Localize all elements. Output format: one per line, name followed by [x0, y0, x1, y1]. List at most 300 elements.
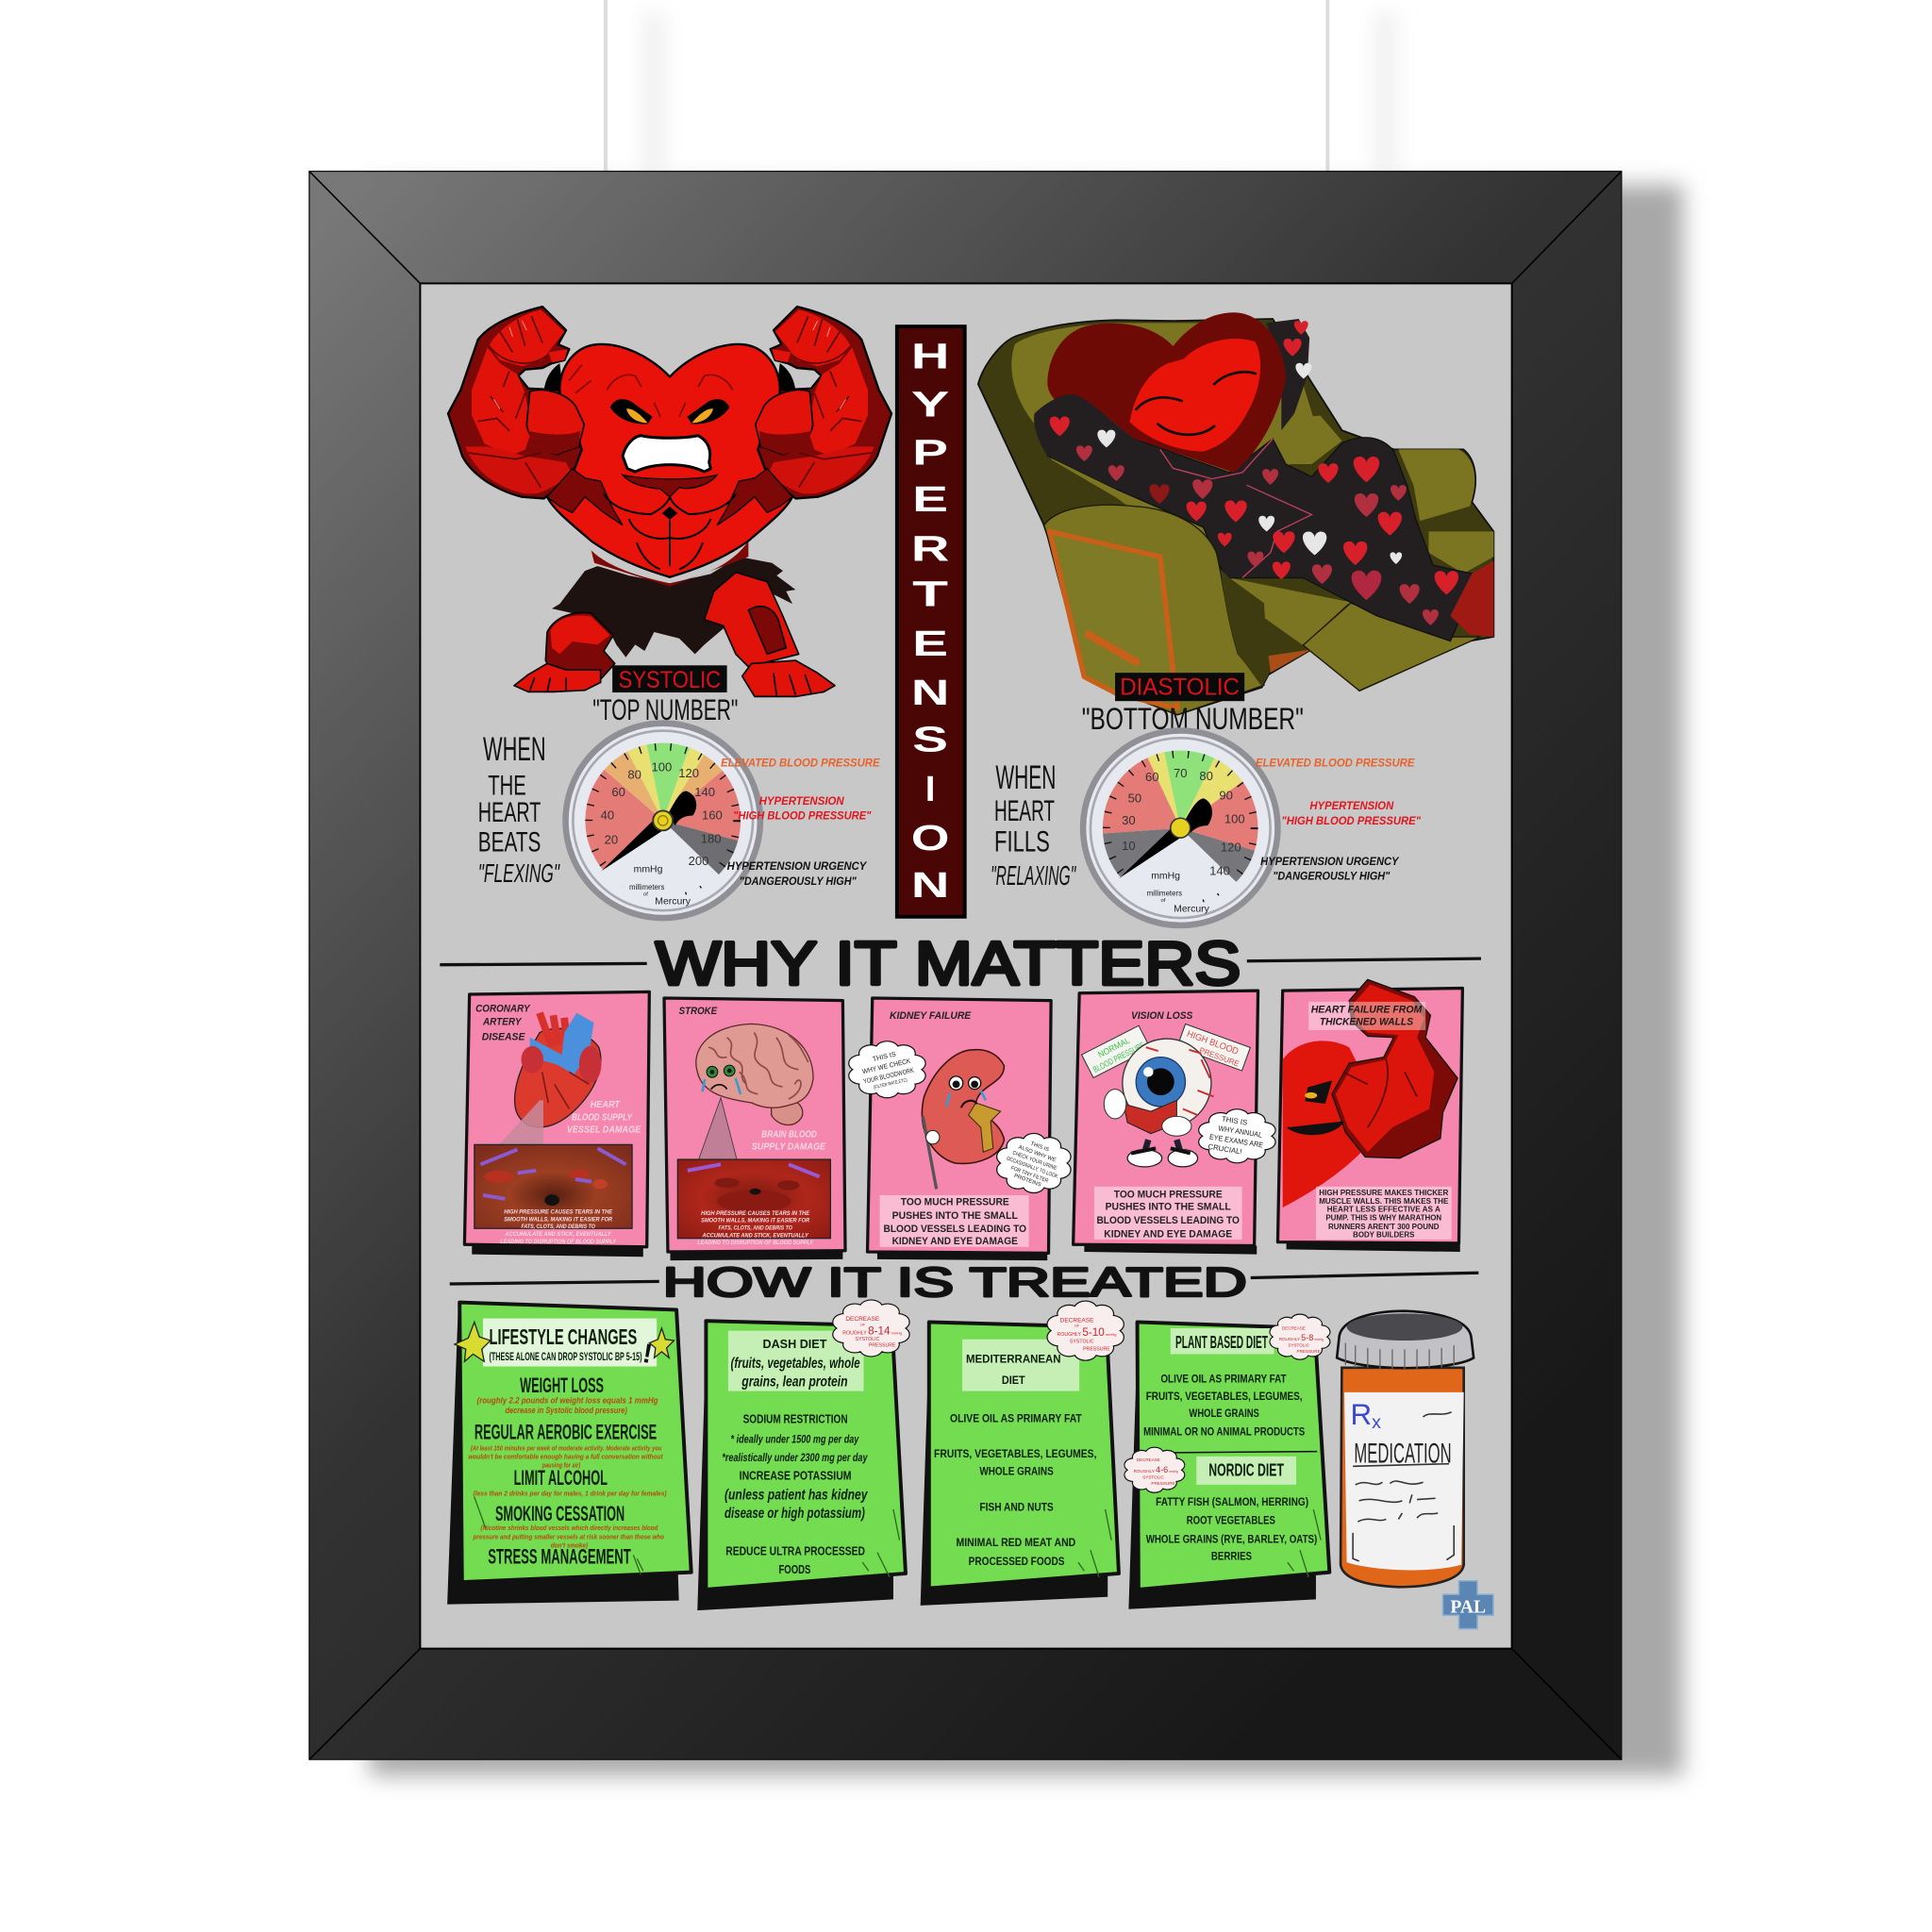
diet lists: ROOT VEGETABLES: [1187, 1514, 1275, 1527]
lifestyle text: LIMIT ALCOHOL: [514, 1466, 608, 1490]
bubble: 5-10 mmHg: [1047, 1301, 1124, 1360]
speech bubble: eye exams: [1199, 1109, 1275, 1163]
title banner: hypertension: Y: [911, 385, 949, 425]
title banner: hypertension: [897, 326, 965, 917]
title box: [483, 1319, 657, 1366]
card heading: [475, 1003, 530, 1042]
lifestyle details: decrease in Systolic blood pressure): [506, 1406, 627, 1415]
sleeping features: [1136, 372, 1256, 435]
lifestyle text: SMOKING CESSATION: [495, 1502, 625, 1525]
vessel damage label: HEART: [591, 1100, 621, 1110]
unit label: mmHg: [634, 865, 663, 875]
sleeping heart: [1047, 312, 1286, 473]
explanation box: PUSHES INTO THE SMALL: [892, 1210, 1018, 1222]
bubble: 5-8 mmHg: ROUGHLY 5-8 mmHg: [1279, 1333, 1324, 1342]
bubble: 5-10 mmHg: PRESSURE: [1083, 1347, 1110, 1353]
lifestyle text: STRESS MANAGEMENT: [488, 1544, 631, 1568]
unit label: mmHg: [1151, 871, 1180, 881]
panel: coronary artery disease: [464, 991, 649, 1257]
explanation box: MUSCLE WALLS. THIS MAKES THE: [1319, 1197, 1449, 1206]
diet titles: NORDIC DIET: [1208, 1460, 1284, 1480]
gauge zone labels: systolic: "DANGEROUSLY HIGH": [740, 874, 857, 888]
dash details: disease or high potassium): [724, 1506, 865, 1522]
vessel damage label: VESSEL DAMAGE: [567, 1124, 641, 1135]
lifestyle text: REGULAR AEROBIC EXERCISE: [475, 1421, 657, 1444]
bubble: 4-6 mmHg: SYSTOLIC: [1142, 1474, 1164, 1479]
heading box: THICKENED WALLS: [1320, 1017, 1414, 1028]
gauge numbers: 140: [694, 785, 715, 799]
explanation box: KIDNEY AND EYE DAMAGE: [1104, 1228, 1232, 1240]
unit label: of: [643, 892, 648, 898]
vessel damage label: [567, 1100, 641, 1135]
lifestyle details: don't smoke): [551, 1541, 589, 1549]
gauge numbers: 180: [701, 831, 722, 845]
explanation box: TOO MUCH PRESSURE: [1114, 1190, 1223, 1201]
bubble: 5-8 mmHg: SYSTOLIC: [1288, 1343, 1310, 1348]
title banner: hypertension: H: [911, 338, 949, 377]
gauge zone labels: diastolic: "HIGH BLOOD PRESSURE": [1281, 814, 1421, 827]
title banner: hypertension: S: [912, 721, 948, 760]
hand note: when heart fills: "RELAXING": [991, 861, 1076, 891]
bubble: 4-6 mmHg: PRESSURE: [1151, 1481, 1175, 1486]
speech bubble: eye exams: CRUCIAL!: [1208, 1142, 1242, 1157]
hand note: when the heart beats: HEART: [478, 797, 541, 828]
seat cushion: [1229, 578, 1355, 616]
gauge numbers: 140: [1209, 863, 1230, 877]
unit label: Mercury: [655, 897, 691, 908]
gauge: systolic: [566, 724, 760, 918]
diet lists: OLIVE OIL AS PRIMARY FAT: [1160, 1372, 1287, 1385]
bubble: 4-6 mmHg: ROUGHLY 4-6 mmHg: [1134, 1465, 1178, 1474]
bubble: 8-14 mmHg: [833, 1300, 909, 1357]
plant title box: [1171, 1328, 1274, 1354]
dash text: REDUCE ULTRA PROCESSED: [725, 1543, 865, 1557]
hand note: when heart fills: HEART: [994, 794, 1055, 827]
label: diastolic: DIASTOLIC: [1120, 675, 1240, 701]
gauge zone labels: systolic: HYPERTENSION URGENCY: [727, 859, 868, 873]
title banner: hypertension: T: [912, 575, 948, 615]
lifestyle details: (Nicotine shrinks blood vessels which directly increases blood: [480, 1524, 658, 1532]
panel: stroke: [664, 998, 845, 1260]
bubble: 5-10 mmHg: ROUGHLY 5-10 mmHg: [1058, 1326, 1116, 1339]
gauge numbers: 10: [1122, 839, 1136, 853]
star icon left: [455, 1322, 491, 1361]
damage explanation: [697, 1210, 814, 1246]
gauge numbers: 80: [627, 767, 641, 781]
damage explanation: [500, 1209, 617, 1245]
orange panel frame: [1050, 531, 1177, 708]
dash details: grains, lean protein: [741, 1374, 848, 1390]
star icon right: [649, 1328, 674, 1357]
shorts: [552, 557, 795, 658]
speech bubble: bloodwork: YOUR BLOODWORK: [862, 1067, 915, 1086]
mediterranean text: MINIMAL RED MEAT AND: [957, 1536, 1075, 1549]
shoulder shadows: [544, 363, 795, 390]
magnifier wedge: [499, 1100, 543, 1144]
bottle cap: [1337, 1311, 1474, 1369]
under footrest: [1269, 649, 1311, 673]
heading: how it is treated: HOW IT IS TREATED: [663, 1260, 1247, 1306]
paper scratch marks: [1078, 1509, 1111, 1577]
card heading: CORONARY: [475, 1003, 530, 1014]
mediterranean text: [934, 1353, 1096, 1568]
footrest: [1303, 603, 1481, 691]
chin: [623, 475, 717, 497]
vessel damage label: BLOOD SUPPLY: [572, 1112, 633, 1123]
gauge zone labels: systolic: HYPERTENSION: [759, 794, 845, 808]
explanation box: RUNNERS AREN'T 300 POUND: [1328, 1223, 1440, 1231]
title banner: hypertension: P: [912, 433, 948, 473]
explanation box: HIGH PRESSURE MAKES THICKER: [1319, 1189, 1449, 1197]
speech bubble: urine: PROTEINS: [1013, 1174, 1041, 1189]
sign: normal blood pressure: BLOOD PRESSURE: [1091, 1041, 1146, 1074]
gauge numbers: 80: [1199, 769, 1213, 783]
lifestyle text: (THESE ALONE CAN DROP SYSTOLIC BP 5-15): [490, 1351, 642, 1363]
lifestyle details: pressure and putting smaller vessels at risk sooner than those who: [473, 1533, 665, 1541]
gauge: diastolic: [1083, 731, 1277, 925]
diet lists: BERRIES: [1211, 1550, 1252, 1563]
hand note: when the heart beats: BEATS: [478, 827, 541, 858]
paper scratch marks: [862, 1509, 899, 1577]
lifestyle details: (less than 2 drinks per day for males, 1 drink per day for females): [474, 1491, 667, 1498]
heading box: HEART FAILURE FROM: [1311, 1005, 1423, 1016]
paper scratch marks: [475, 1497, 643, 1574]
diet titles: [1175, 1332, 1284, 1480]
sleeve behind head: [1034, 394, 1147, 490]
dash text: [725, 1337, 865, 1576]
gauge zone labels: diastolic: ELEVATED BLOOD PRESSURE: [1256, 756, 1415, 769]
mediterranean text: MEDITERRANEAN: [966, 1353, 1061, 1366]
gauge zone labels: diastolic: [1256, 756, 1421, 883]
card heading: VISION LOSS: [1131, 1010, 1193, 1022]
heading box: [1308, 1002, 1425, 1030]
right arm: [756, 307, 891, 498]
diet lists: MINIMAL OR NO ANIMAL PRODUCTS: [1143, 1425, 1305, 1439]
explanation box: KIDNEY AND EYE DAMAGE: [892, 1236, 1018, 1247]
explanation box: TOO MUCH PRESSURE: [901, 1196, 1009, 1208]
label: systolic: SYSTOLIC: [619, 668, 721, 693]
title banner: hypertension: E: [912, 625, 948, 664]
damage explanation: LEADING TO DISRUPTION OF BLOOD SUPPLY: [500, 1239, 617, 1245]
sign: high blood pressure: [1177, 1024, 1250, 1071]
unit label: millimeters: [629, 883, 664, 891]
bubble: 5-8 mmHg: PRESSURE: [1297, 1349, 1321, 1354]
label: [1344, 1392, 1464, 1570]
magnifier wedge: [699, 1098, 737, 1159]
title banner: hypertension: O: [911, 819, 949, 858]
dash details: (unless patient has kidney: [724, 1488, 869, 1504]
gauge zone labels: diastolic: HYPERTENSION URGENCY: [1260, 855, 1400, 868]
explanation box: [880, 1195, 1029, 1247]
damage explanation: HIGH PRESSURE CAUSES TEARS IN THE: [504, 1209, 613, 1216]
exclamation mark: !: [641, 1339, 655, 1370]
icon: crutch: [923, 1116, 940, 1189]
hand note: when heart fills: FILLS: [994, 825, 1050, 858]
hand note: when the heart beats: [478, 731, 560, 888]
icon: medication bottle: MEDICATION: [1354, 1438, 1452, 1469]
speech bubble: eye exams: EYE EXAMS ARE: [1208, 1133, 1264, 1149]
gauge numbers: 70: [1174, 766, 1188, 780]
bubble: 4-6 mmHg: [1124, 1447, 1185, 1492]
hand note: when heart fills: [991, 759, 1076, 891]
pajama hearts: [1050, 321, 1458, 625]
hand note: when the heart beats: WHEN: [483, 731, 546, 768]
explanation box: BLOOD VESSELS LEADING TO: [1096, 1215, 1240, 1226]
angry eyes: [569, 365, 733, 424]
icon: medication bottle: R: [1351, 1398, 1372, 1431]
gauge zone labels: systolic: ELEVATED BLOOD PRESSURE: [721, 756, 880, 769]
lifestyle details: (roughly 2.2 pounds of weight loss equals 1 mmHg: [476, 1396, 658, 1406]
needle: [1119, 798, 1212, 878]
dash details: (fruits, vegetables, whole: [731, 1356, 860, 1372]
lifestyle text: LIFESTYLE CHANGES: [490, 1324, 637, 1349]
gauge zone labels: diastolic: "DANGEROUSLY HIGH": [1273, 870, 1390, 883]
lifestyle text: WEIGHT LOSS: [520, 1374, 604, 1397]
damage explanation: FATS, CLOTS, AND DEBRIS TO: [521, 1224, 595, 1230]
title banner: hypertension: N: [911, 674, 949, 713]
diet lists: WHOLE GRAINS: [1189, 1407, 1259, 1420]
mediterranean text: FRUITS, VEGETABLES, LEGUMES,: [934, 1447, 1096, 1460]
panel: mediterranean diet: [921, 1301, 1124, 1606]
character: relaxing heart in recliner: [978, 312, 1493, 715]
side cushions: [1286, 416, 1342, 464]
nordic title box: [1196, 1457, 1296, 1485]
gauge numbers: 50: [1128, 791, 1141, 805]
brain damage label: SUPPLY DAMAGE: [752, 1142, 826, 1153]
icon: eyeball character: [1104, 1039, 1214, 1167]
speech bubble: urine: FOR TINY FILTER: [1010, 1166, 1049, 1185]
label: bottom number: "BOTTOM NUMBER": [1082, 701, 1304, 736]
snarling mouth: [623, 436, 710, 472]
unit label: millimeters: [1147, 890, 1182, 898]
icon: sad kidney: [922, 1050, 1004, 1163]
brain damage label: BRAIN BLOOD: [761, 1130, 817, 1141]
dark muscle patches: [547, 469, 792, 525]
mediterranean text: DIET: [1002, 1374, 1025, 1387]
logo: PAL: PAL: [1450, 1598, 1486, 1618]
diet lists: WHOLE GRAINS (RYE, BARLEY, OATS): [1146, 1532, 1317, 1545]
bubble: 8-14 mmHg: OF: [860, 1322, 866, 1326]
bubble: 5-10 mmHg: SYSTOLIC: [1070, 1340, 1094, 1345]
dash text: SODIUM RESTRICTION: [743, 1412, 848, 1426]
damage explanation: LEADING TO DISRUPTION OF BLOOD SUPPLY: [697, 1240, 814, 1246]
sign: high blood pressure: PRESSURE: [1198, 1045, 1241, 1069]
panel: kidney failure: [849, 998, 1071, 1260]
card heading: DISEASE: [482, 1031, 525, 1042]
gauge numbers: 120: [678, 766, 699, 780]
icon: anatomical heart: [515, 1013, 601, 1127]
card heading: KIDNEY FAILURE: [890, 1010, 972, 1022]
bottle body: [1341, 1368, 1464, 1587]
title banner: hypertension: E: [912, 480, 948, 520]
gauge numbers: 100: [651, 760, 672, 774]
left leg and foot: [514, 612, 615, 691]
dash details: [722, 1356, 869, 1522]
explanation box: [1094, 1187, 1242, 1240]
dash details: *realistically under 2300 mg per day: [722, 1452, 869, 1464]
gauge zone labels: systolic: [721, 756, 880, 888]
gauge numbers: 40: [601, 808, 614, 823]
bubble: 8-14 mmHg: DECREASE: [845, 1316, 880, 1323]
explanation box: BLOOD VESSELS LEADING TO: [883, 1224, 1026, 1235]
explanation box: [1316, 1187, 1452, 1240]
heart body: [547, 344, 792, 577]
icon: sad brain: [696, 1024, 813, 1125]
explanation box: PUSHES INTO THE SMALL: [1106, 1202, 1231, 1213]
bubble: 5-8 mmHg: DECREASE: [1282, 1325, 1306, 1330]
title banner: hypertension: I: [925, 770, 935, 809]
diet lists: [1143, 1372, 1317, 1563]
mediterranean text: OLIVE OIL AS PRIMARY FAT: [950, 1411, 1082, 1424]
back cushion: [1011, 323, 1316, 578]
bubble: 8-14 mmHg: SYSTOLIC: [856, 1337, 880, 1342]
title banner: hypertension: N: [911, 866, 949, 906]
speech bubble: bloodwork: [849, 1041, 925, 1098]
dash text: INCREASE POTASSIUM: [740, 1469, 852, 1483]
raised arm sleeve: [1266, 319, 1309, 430]
heading: why it matters: WHY IT MATTERS: [656, 929, 1241, 998]
unit label: [629, 865, 691, 908]
diet titles: PLANT BASED DIET: [1175, 1332, 1268, 1352]
title banner: hypertension: R: [911, 529, 949, 569]
unit label: Mercury: [1174, 905, 1210, 915]
hand note: when the heart beats: THE: [488, 770, 526, 801]
title box: [728, 1331, 864, 1391]
diet lists: FRUITS, VEGETABLES, LEGUMES,: [1146, 1390, 1303, 1403]
damage explanation: SMOOTH WALLS, MAKING IT EASIER FOR: [504, 1216, 612, 1223]
gauge numbers: 120: [1221, 841, 1241, 855]
panel: dash diet: [697, 1300, 909, 1610]
bubble: 5-10 mmHg: DECREASE: [1060, 1317, 1094, 1324]
lifestyle details: [468, 1396, 667, 1549]
bubble: 8-14 mmHg: ROUGHLY 8-14 mmHg: [842, 1325, 902, 1338]
dash text: FOODS: [778, 1562, 811, 1576]
lifestyle details: wouldn't be comfortable enough having a full conversation without: [468, 1453, 663, 1460]
damage explanation: SMOOTH WALLS, MAKING IT EASIER FOR: [701, 1218, 809, 1224]
mediterranean text: FISH AND NUTS: [979, 1500, 1054, 1513]
panel: heart failure: [1277, 979, 1462, 1252]
dash text: DASH DIET: [762, 1337, 826, 1351]
front arm: [1044, 505, 1264, 715]
gauge numbers: [601, 760, 723, 868]
speech bubble: bloodwork: (FILTER RATE,ETC): [874, 1077, 908, 1091]
chest and abs: [604, 493, 736, 569]
panel: lifestyle changes: [447, 1303, 691, 1605]
explanation box: PUMP. THIS IS WHY MARATHON: [1325, 1214, 1441, 1223]
hand note: when the heart beats: "FLEXING": [478, 858, 560, 888]
dash details: * ideally under 1500 mg per day: [731, 1433, 859, 1445]
card heading: STROKE: [679, 1006, 718, 1017]
right leg and foot: [705, 573, 835, 696]
picture frame: [309, 172, 1622, 1759]
damage explanation: FATS, CLOTS, AND DEBRIS TO: [718, 1225, 792, 1232]
chest underside: [591, 541, 748, 587]
bubble: 5-10 mmHg: OF: [1074, 1324, 1080, 1328]
brain damage label: [752, 1130, 826, 1153]
gauge numbers: 200: [689, 854, 708, 868]
sign: normal blood pressure: [1082, 1025, 1151, 1077]
unit label: of: [1161, 898, 1166, 904]
biceps over heart: [526, 390, 813, 455]
speech bubble: bloodwork: THIS IS: [872, 1051, 897, 1063]
card heading: ARTERY: [482, 1017, 522, 1028]
gauge numbers: 100: [1224, 811, 1245, 825]
recliner silhouette: [978, 319, 1493, 715]
bubble: 5-8 mmHg: [1270, 1314, 1330, 1359]
title box: [962, 1340, 1079, 1391]
panel: plant based and nordic diets: [1124, 1314, 1330, 1609]
left arm: [448, 307, 584, 498]
label: top number: "TOP NUMBER": [592, 693, 738, 726]
gauge numbers: 20: [605, 833, 618, 847]
gauge numbers: 90: [1219, 789, 1233, 803]
speech bubble: eye exams: WHY ANNUAL: [1218, 1124, 1263, 1140]
sign: normal blood pressure: NORMAL: [1096, 1036, 1131, 1059]
lifestyle details: (At least 150 minutes per week of moderate activity. Moderate activity you: [471, 1444, 662, 1452]
mediterranean text: WHOLE GRAINS: [979, 1464, 1054, 1477]
bubble: 4-6 mmHg: DECREASE: [1137, 1457, 1160, 1462]
paper scratch marks: [1288, 1509, 1321, 1577]
heading: why it matters: [440, 929, 1481, 998]
sign: high blood pressure: HIGH BLOOD: [1185, 1029, 1240, 1058]
heading: how it is treated: [450, 1260, 1478, 1306]
character: muscular systolic heart: [448, 307, 891, 696]
gauge numbers: 60: [1145, 770, 1158, 784]
gauge zone labels: systolic: "HIGH BLOOD PRESSURE": [733, 809, 872, 823]
bubble: 8-14 mmHg: PRESSURE: [869, 1343, 896, 1349]
speech bubble: urine: THIS IS: [1029, 1141, 1050, 1153]
pajama body: [1047, 422, 1474, 641]
hanging strings: [604, 0, 1397, 173]
foot: [1450, 561, 1493, 637]
arm side shadow: [1221, 570, 1269, 687]
frame drop shadow: [370, 185, 1683, 1775]
logo: PAL: [1442, 1581, 1493, 1629]
gauge numbers: 60: [611, 785, 625, 799]
explanation box: BODY BUILDERS: [1353, 1230, 1415, 1239]
damage explanation: ACCUMULATE AND STICK, EVENTUALLY: [702, 1232, 808, 1239]
damage explanation: HIGH PRESSURE CAUSES TEARS IN THE: [701, 1210, 810, 1217]
damage explanation: ACCUMULATE AND STICK, EVENTUALLY: [505, 1231, 611, 1238]
explanation box: HEART LESS EFFECTIVE AS A: [1327, 1206, 1441, 1214]
icon: medication bottle: x: [1372, 1412, 1381, 1433]
panel: vision loss: [1074, 991, 1275, 1255]
lifestyle details: pausing for air): [541, 1462, 581, 1470]
flexing heart close-up: [1283, 979, 1457, 1208]
icon: medication bottle: [1337, 1311, 1474, 1587]
recliner handle: [1089, 635, 1136, 662]
speech bubble: eye exams: THIS IS: [1221, 1114, 1248, 1127]
pajama trim: [1160, 439, 1311, 578]
artery close-up: [677, 1159, 830, 1239]
mediterranean text: PROCESSED FOODS: [969, 1555, 1064, 1568]
speech bubble: urine: OCCASIONALLY, TO LOOK: [1006, 1157, 1058, 1180]
gauge numbers: 30: [1122, 813, 1136, 827]
hand note: when heart fills: WHEN: [995, 759, 1056, 796]
heart face: [1130, 339, 1260, 452]
gauge numbers: [1122, 766, 1245, 877]
needle: [601, 791, 696, 871]
speech bubble: urine: ALSO WHY WE: [1018, 1144, 1057, 1163]
speech bubble: bloodwork: WHY WE CHECK: [861, 1058, 911, 1075]
gauge zone labels: diastolic: HYPERTENSION: [1309, 799, 1394, 812]
speech bubble: urine: CHECK YOUR URINE: [1011, 1151, 1058, 1172]
speech bubble: urine: [997, 1133, 1071, 1193]
gauge numbers: 160: [702, 808, 723, 823]
unit label: [1147, 871, 1210, 915]
artery close-up: [475, 1144, 632, 1228]
lifestyle text: [475, 1324, 657, 1568]
